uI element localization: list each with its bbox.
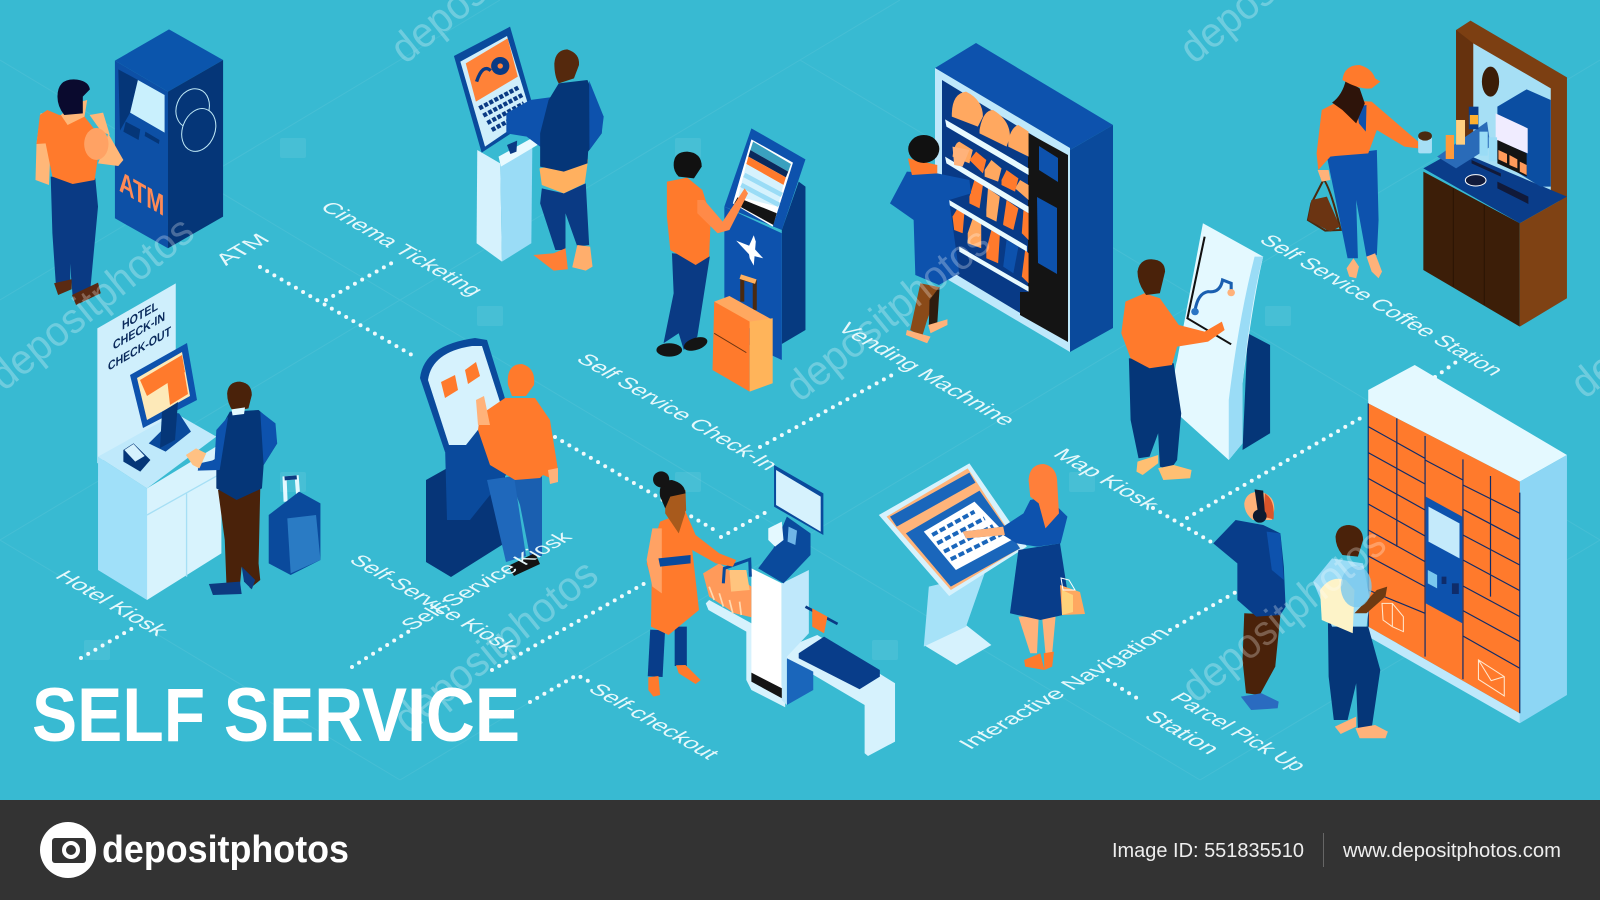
person at map kiosk xyxy=(1121,259,1225,480)
icon: hotel check-in screen and sign: HOTEL xyxy=(122,298,158,333)
icon: cinema ticket kiosk xyxy=(454,27,537,262)
labels on isometric floor: Interactive Navigation xyxy=(953,624,1175,753)
labels on isometric floor xyxy=(50,198,1510,775)
panel: self-service kiosk scene xyxy=(420,338,558,577)
icon: faint camera watermarks xyxy=(84,138,1489,660)
person with headphones xyxy=(1213,489,1286,710)
person at ATM xyxy=(35,79,123,305)
person with backpack xyxy=(1313,525,1388,738)
panel: ATM scene xyxy=(35,29,223,305)
person at kiosk xyxy=(476,364,558,576)
footer band xyxy=(0,800,1600,900)
icon: depositphotos logo xyxy=(40,822,96,878)
website: www.depositphotos.com xyxy=(1342,840,1561,862)
person at coffee station xyxy=(1308,65,1432,278)
icon: coffee station xyxy=(1423,21,1567,327)
icon: shopping basket xyxy=(703,559,751,617)
icon: vending machine xyxy=(935,43,1113,352)
icon: blue suitcase xyxy=(269,477,320,575)
icon: orange suitcase xyxy=(713,277,773,392)
icon: ATM machine: ATM xyxy=(119,164,164,223)
icon: map kiosk xyxy=(1174,223,1270,460)
panel: coffee station scene xyxy=(1308,21,1567,327)
icon: hotel check-in screen and sign: CHECK-OUT xyxy=(108,323,172,374)
panel: interactive navigation scene xyxy=(879,463,1071,670)
icon: interactive table xyxy=(879,463,1027,665)
labels on isometric floor: Cinema Ticketing xyxy=(315,198,490,299)
labels on isometric floor: Self Service Check-In xyxy=(571,350,785,474)
title: SELF SERVICE xyxy=(32,673,520,758)
panel: map kiosk scene xyxy=(1121,223,1270,480)
icon: hotel check-in screen and sign: CHECK-IN xyxy=(113,309,165,353)
icon: parcel locker xyxy=(1368,365,1567,723)
labels on isometric floor: Self-checkout xyxy=(583,680,726,763)
person at cinema kiosk xyxy=(506,49,604,271)
person at hotel kiosk xyxy=(186,382,277,595)
icon: shopping bag xyxy=(1060,578,1085,615)
person with basket xyxy=(647,471,736,697)
watermark text: depositphotos xyxy=(384,549,606,742)
icon: hotel kiosk xyxy=(97,283,221,600)
panel: vending machine scene xyxy=(890,43,1113,352)
person checking in xyxy=(656,152,748,357)
labels on isometric floor: Vending Machnine xyxy=(832,319,1022,429)
panel: hotel kiosk scene xyxy=(97,283,320,600)
person at table xyxy=(963,464,1071,670)
icon: check-in kiosk xyxy=(724,128,805,360)
labels on isometric floor: Self Service Coffee Station xyxy=(1254,231,1510,379)
icon: self-service kiosk xyxy=(420,338,510,577)
labels on isometric floor: Map Kiosk xyxy=(1048,445,1166,514)
brand name: depositphotos xyxy=(102,829,349,871)
labels on isometric floor: Self-Service Kiosk xyxy=(395,527,578,634)
icon: ATM machine xyxy=(115,29,223,248)
dotted connector lines xyxy=(81,260,1459,702)
labels on isometric floor: Hotel Kiosk xyxy=(50,567,175,640)
watermark text: depositphotos xyxy=(776,217,998,410)
panel: parcel locker scene xyxy=(1213,365,1567,738)
watermark text: depositphotos xyxy=(1172,518,1394,711)
labels on isometric floor: Station xyxy=(1139,707,1226,758)
labels on isometric floor: Parcel Pick Up xyxy=(1165,689,1313,775)
icon: hotel check-in screen and sign xyxy=(108,298,197,448)
labels on isometric floor: Self-Service Kiosk xyxy=(344,551,525,656)
labels on isometric floor: ATM xyxy=(209,230,275,269)
icon: self-checkout machine xyxy=(706,465,895,756)
panel: cinema ticketing scene xyxy=(454,27,537,262)
panel: self-checkout scene xyxy=(647,465,895,756)
image id: Image ID: 551835510 xyxy=(1112,840,1304,862)
person at vending machine xyxy=(890,135,971,343)
